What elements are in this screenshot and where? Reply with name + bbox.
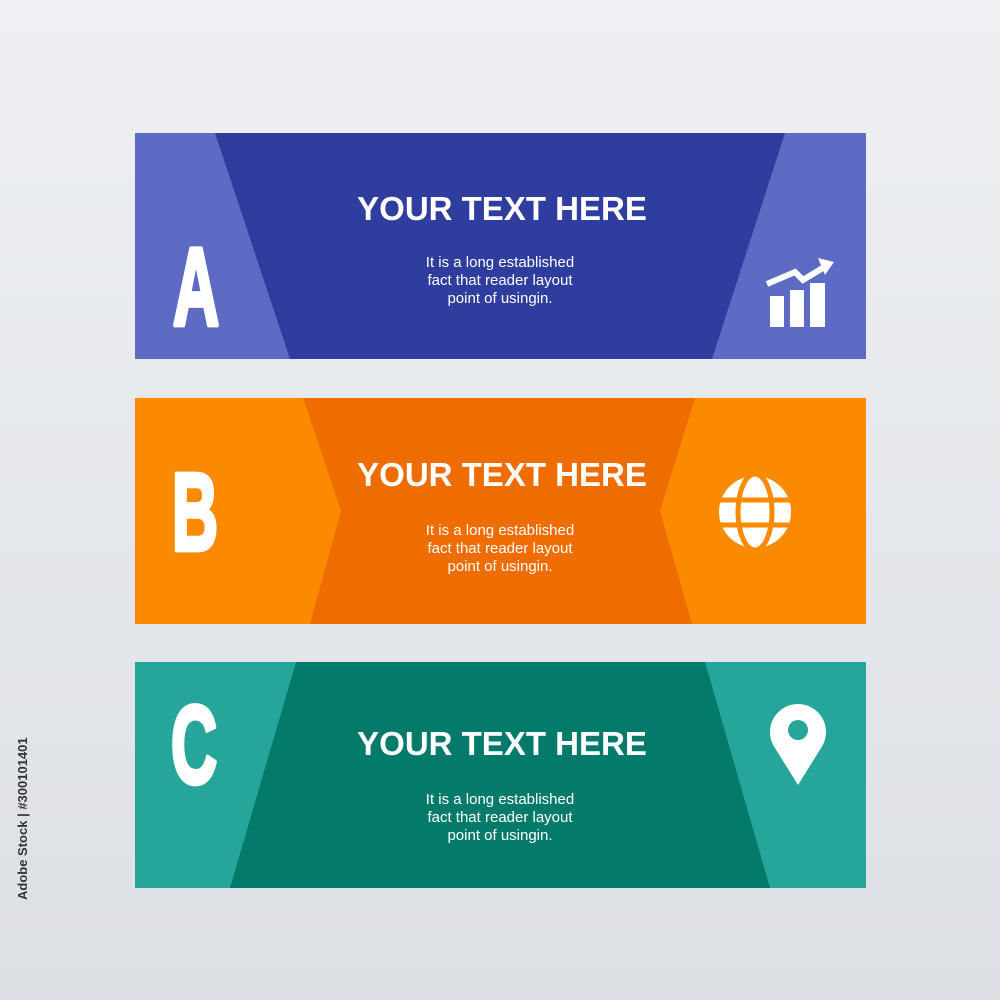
panel: B <box>135 398 866 624</box>
text C: point of usingin. <box>447 827 553 844</box>
panel: A <box>135 133 866 359</box>
letter A: A <box>173 226 219 349</box>
panel: C <box>135 662 866 888</box>
text B: It is a long established <box>426 522 574 539</box>
letter C: C <box>171 684 217 807</box>
text B: point of usingin. <box>447 558 553 575</box>
icon: growth chart <box>767 258 834 327</box>
heading B: YOUR TEXT HERE <box>357 456 647 493</box>
text A: fact that reader layout <box>427 272 573 289</box>
text A: point of usingin. <box>447 290 553 307</box>
text A: It is a long established <box>426 254 574 271</box>
text B: fact that reader layout <box>427 540 573 557</box>
icon: globe <box>715 474 795 550</box>
heading C: YOUR TEXT HERE <box>357 725 647 762</box>
side id text: Adobe Stock | #300101401 <box>15 737 30 900</box>
letter B: B <box>172 451 218 574</box>
icon: location pin <box>770 704 826 785</box>
text C: fact that reader layout <box>427 809 573 826</box>
heading A: YOUR TEXT HERE <box>357 190 647 227</box>
text C: It is a long established <box>426 791 574 808</box>
